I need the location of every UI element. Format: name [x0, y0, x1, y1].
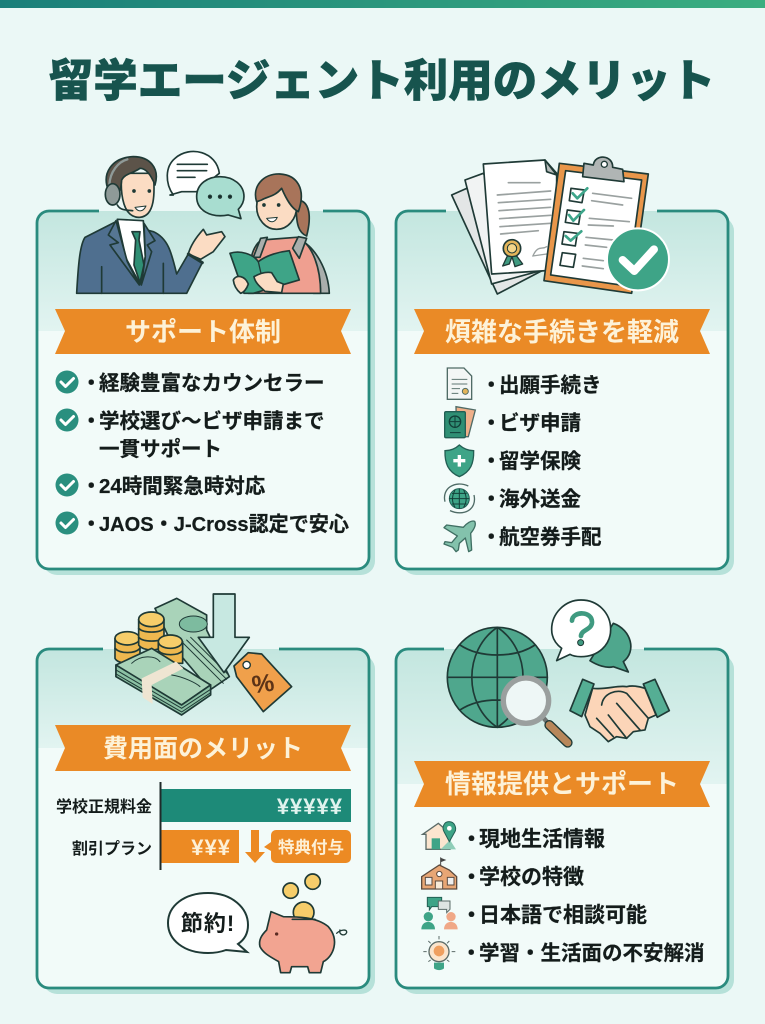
icon: school building: [422, 857, 457, 889]
list: procedures: ・: [481, 412, 502, 435]
ribbon: support heading: [55, 309, 351, 354]
list: information items: 学習・生活面の不安解消: [479, 942, 704, 965]
illustration: documents and clipboard: [452, 157, 669, 294]
list: procedures: ビザ申請: [499, 412, 581, 435]
checklist: 24時間緊急時対応: [99, 475, 266, 498]
checklist: 一貫サポート: [99, 438, 222, 461]
bar chart: fee comparison: [56, 782, 351, 870]
title: 留学エージェント利用のメリット: [49, 57, 715, 106]
panel: information: [396, 600, 734, 994]
list: procedures: ・: [481, 374, 502, 397]
list: procedures: 海外送金: [499, 488, 581, 511]
callout: savings speech bubble: [168, 893, 248, 953]
icon: insurance shield: [445, 445, 474, 477]
bar chart: fee comparison: ¥¥¥¥¥: [277, 794, 343, 819]
icon: passport: [445, 407, 475, 438]
list: information items: ・: [461, 828, 482, 851]
icon: globe remittance: [444, 484, 474, 513]
checklist: ・: [81, 475, 102, 498]
panel: paperwork: [396, 157, 734, 575]
checklist: [56, 370, 349, 536]
icon: light bulb: [423, 936, 455, 970]
icon: piggy bank: [260, 874, 347, 973]
illustration: globe, question and handshake: [447, 600, 669, 743]
ribbon: information heading: 情報提供とサポート: [445, 769, 679, 799]
ribbon: paperwork heading: 煩雑な手続きを軽減: [445, 317, 679, 347]
list: information items: ・: [461, 942, 482, 965]
ribbon: paperwork heading: [414, 309, 710, 354]
icon: house and pin: [423, 822, 456, 849]
arrow: reduced cost: [245, 830, 265, 863]
ribbon: information heading: [414, 761, 710, 807]
list: information items: [421, 822, 704, 970]
panel: cost: [37, 594, 375, 994]
list: procedures: 留学保険: [499, 450, 581, 473]
bar chart: fee comparison: 割引プラン: [72, 840, 152, 858]
list: information items: ・: [461, 866, 482, 889]
bar chart: fee comparison: 学校正規料金: [56, 797, 152, 816]
list: procedures: 出願手続き: [499, 374, 602, 397]
list: information items: ・: [461, 904, 482, 927]
list: procedures: 航空券手配: [499, 526, 602, 549]
bar chart: fee comparison: 特典付与: [278, 837, 344, 857]
checklist: ・: [81, 513, 102, 536]
checklist: JAOS・J-Cross認定で安心: [99, 513, 349, 536]
illustration: counselor and student: [77, 151, 329, 293]
list: information items: 学校の特徴: [479, 866, 584, 889]
list: procedures: [444, 368, 602, 552]
list: procedures: ・: [481, 488, 502, 511]
icon: people talking: [421, 897, 458, 929]
icon: airplane: [444, 521, 475, 552]
checklist: 学校選び〜ビザ申請まで: [99, 410, 324, 433]
callout: bonus: [264, 830, 351, 863]
list: information items: 現地生活情報: [479, 828, 605, 851]
illustration: money and discount tag: [115, 594, 292, 715]
panel: support: [37, 151, 375, 575]
checklist: 経験豊富なカウンセラー: [99, 372, 324, 395]
icon: application form: [447, 368, 472, 399]
bar chart: fee comparison: ¥¥¥: [191, 835, 231, 860]
callout: savings speech bubble: 節約!: [181, 911, 235, 936]
list: information items: 日本語で相談可能: [479, 904, 647, 927]
top bar: [0, 0, 765, 8]
ribbon: support heading: サポート体制: [125, 317, 281, 347]
ribbon: cost heading: [55, 725, 351, 771]
list: procedures: ・: [481, 450, 502, 473]
checklist: ・: [81, 372, 102, 395]
ribbon: cost heading: 費用面のメリット: [103, 735, 303, 763]
list: procedures: ・: [481, 526, 502, 549]
discount percent sign: %: [250, 669, 276, 699]
checklist: ・: [81, 410, 102, 433]
